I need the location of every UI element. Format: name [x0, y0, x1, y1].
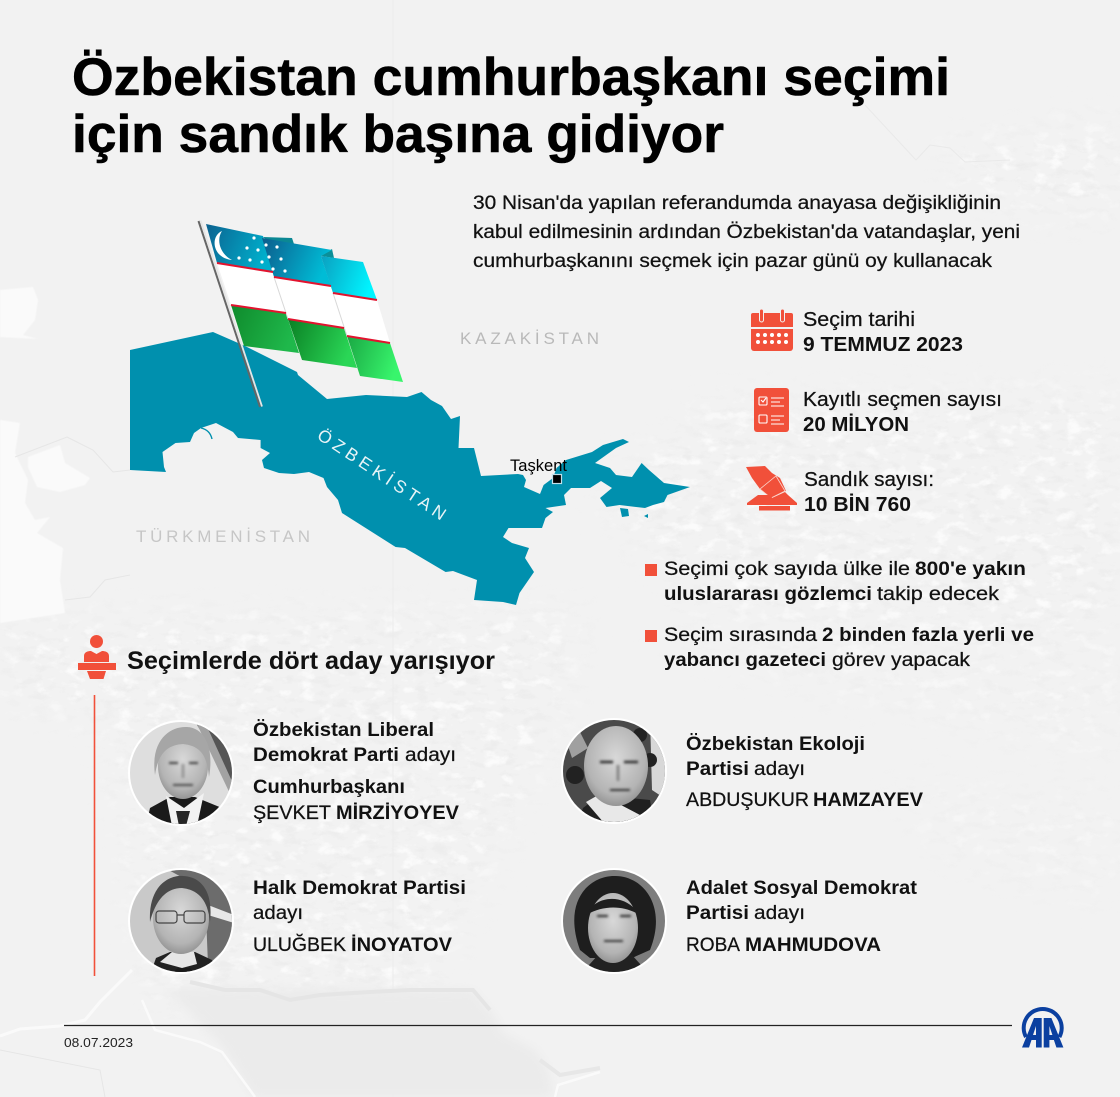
stat: ballot boxes: Sandık sayısı:	[804, 469, 934, 491]
title: Özbekistan cumhurbaşkanı seçimi	[72, 48, 950, 107]
candidate text: Hamzayev: HAMZAYEV	[813, 789, 923, 811]
title: için sandık başına gidiyor	[72, 105, 724, 164]
portrait: Mahmudova	[561, 868, 667, 975]
candidate text: Inoyatov	[253, 877, 466, 956]
bullet: journalists: 2 binden fazla yerli ve	[822, 624, 1034, 646]
stat: registered voters: Kayıtlı seçmen sayısı	[803, 389, 1002, 411]
stat: registered voters: 20 MİLYON	[803, 413, 909, 436]
intro text: cumhurbaşkanını seçmek için pazar günü oy kullanacak	[473, 251, 993, 272]
icon: speaker at podium	[78, 635, 116, 679]
candidate text: Mirziyoyev: Cumhurbaşkanı	[253, 776, 405, 798]
title	[72, 48, 950, 164]
candidate text: Mahmudova	[686, 877, 918, 956]
candidate text: Inoyatov: ULUĞBEK	[253, 933, 346, 956]
candidate text: Mirziyoyev: Demokrat Parti	[253, 744, 399, 766]
bullet: journalists	[645, 624, 1034, 671]
candidate text: Mahmudova: Adalet Sosyal Demokrat	[686, 877, 918, 899]
map of Uzbekistan	[130, 332, 690, 605]
candidate text: Inoyatov: İNOYATOV	[351, 933, 452, 956]
bullet: observers	[645, 558, 1026, 605]
icon: calendar	[751, 309, 793, 351]
stat: election date	[751, 309, 963, 356]
logo: Anadolu Agency	[1022, 1009, 1063, 1048]
portrait: Mirziyoyev	[128, 720, 236, 830]
candidate text: Hamzayev: adayı	[754, 758, 805, 780]
bullet: journalists: yabancı gazeteci	[664, 649, 826, 671]
Tashkent marker: Taşkent	[510, 456, 567, 475]
stat: registered voters	[754, 388, 1002, 436]
bullet: journalists: görev yapacak	[832, 649, 970, 671]
date: 08.07.2023	[64, 1035, 133, 1050]
candidate text: Mahmudova: MAHMUDOVA	[745, 934, 881, 956]
candidates heading	[78, 635, 495, 679]
candidate text: Mirziyoyev: Özbekistan Liberal	[253, 718, 434, 741]
bullet: observers: takip edecek	[877, 583, 999, 605]
candidate text: Hamzayev: ABDUŞUKUR	[686, 789, 809, 811]
candidate text: Mahmudova: Partisi	[686, 902, 749, 924]
candidate text: Inoyatov: adayı	[253, 902, 303, 924]
candidates timeline line	[94, 695, 96, 976]
candidate text: Inoyatov: Halk Demokrat Partisi	[253, 877, 466, 899]
intro text: 30 Nisan'da yapılan referandumda anayasa değişikliğinin	[473, 193, 1001, 214]
candidate text: Mahmudova: ROBA	[686, 934, 740, 956]
bullet: observers: uluslararası gözlemci	[664, 583, 872, 605]
candidate text: Hamzayev: Partisi	[686, 758, 749, 780]
stat: election date: Seçim tarihi	[803, 309, 915, 331]
country labels	[136, 329, 599, 546]
icon: checklist	[754, 388, 789, 432]
stat: election date: 9 TEMMUZ 2023	[803, 334, 963, 356]
candidate text: Mirziyoyev: ŞEVKET	[253, 802, 331, 824]
intro text: kabul edilmesinin ardından Özbekistan'da vatandaşlar, yeni	[473, 222, 1020, 243]
candidate text: Mirziyoyev: MİRZİYOYEV	[336, 801, 459, 824]
candidate text: Mirziyoyev	[253, 718, 459, 824]
bullet: observers: 800'e yakın	[915, 558, 1026, 580]
candidate text: Hamzayev: Özbekistan Ekoloji	[686, 732, 865, 755]
country labels: KAZAKİSTAN	[460, 329, 599, 348]
intro text	[473, 193, 1020, 272]
candidates heading: Seçimlerde dört aday yarışıyor	[127, 647, 495, 675]
label: Özbekistan on map: ÖZBEKİSTAN	[314, 425, 450, 524]
stat: ballot boxes	[746, 466, 934, 516]
footer rule	[64, 1024, 1012, 1026]
country labels: TÜRKMENİSTAN	[136, 527, 310, 546]
portrait: Hamzayev	[561, 718, 667, 830]
candidate text: Mahmudova: adayı	[754, 902, 805, 924]
candidate text: Hamzayev	[686, 732, 923, 811]
Tashkent marker	[510, 456, 567, 484]
flag of Uzbekistan	[198, 220, 403, 407]
flag pole	[198, 220, 262, 407]
candidate text: Mirziyoyev: adayı	[405, 744, 456, 766]
bullet: journalists: Seçim sırasında	[664, 624, 817, 646]
portrait: Inoyatov	[128, 868, 234, 975]
bullet: observers: Seçimi çok sayıda ülke ile	[664, 558, 910, 580]
icon: ballot box	[746, 466, 797, 510]
stat: ballot boxes: 10 BİN 760	[804, 493, 911, 516]
